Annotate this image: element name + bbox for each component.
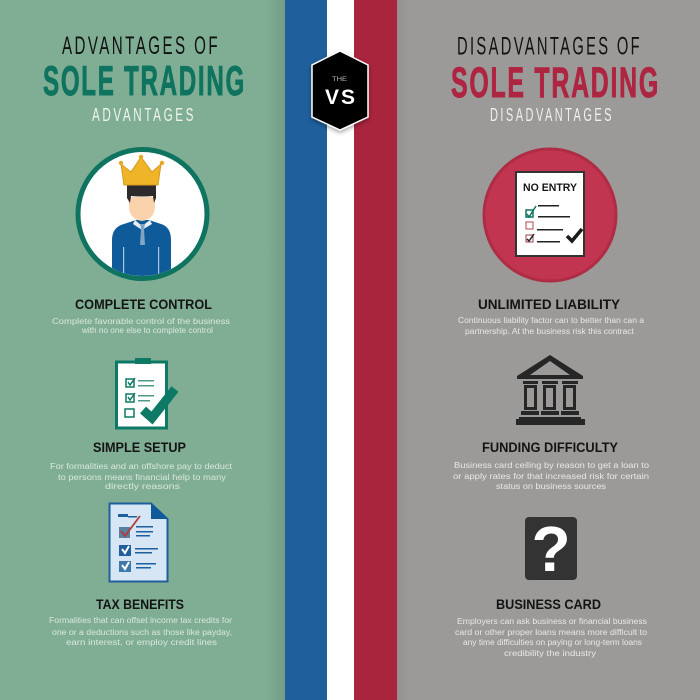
text block: funding difficulty [453,440,650,491]
text block: funding difficulty: FUNDING DIFFICULTY [482,440,618,455]
panel: advantages background [0,0,285,700]
heading: advantages of sole trading [43,32,246,125]
text block: tax benefits: earn interest, or employ credit lines [66,638,217,647]
text block: business card: card or other proper loans means more difficult to [455,628,648,637]
text block: simple setup: to persons means financial help to many [58,473,226,482]
text block: funding difficulty: or apply rates for that increased risk for certain [453,472,649,481]
icon: tax document [110,503,168,582]
heading: advantages of sole trading: SOLE TRADING [43,57,246,104]
icon: no entry checklist [484,149,616,281]
text block: tax benefits: Formalities that can offset income tax credits for [49,616,232,625]
icon: bank building [516,355,585,425]
text block: unlimited liability: UNLIMITED LIABILITY [478,297,620,312]
text block: simple setup: SIMPLE SETUP [93,440,186,455]
text block: funding difficulty: Business card ceiling by reason to get a loan to [454,461,650,470]
text block: funding difficulty: status on business sources [496,482,606,491]
icon: businessman with crown [78,150,207,278]
text block: business card: credibility the industry [504,649,596,658]
text block: unlimited liability: partnership. At the business risk this contract [465,327,635,336]
text block: complete control: with no one else to complete control [81,326,213,335]
text block: complete control: Complete favorable control of the business [52,317,230,326]
icon: clipboard with check [116,358,175,428]
text block: tax benefits: TAX BENEFITS [96,597,184,612]
text block: simple setup [50,440,233,491]
heading: advantages of sole trading: ADVANTAGES OF [62,32,220,60]
text block: business card [455,597,648,658]
heading: disadvantages of sole trading [451,32,660,125]
heading: advantages of sole trading: ADVANTAGES [92,105,196,125]
text block: business card: any time difficulties on paying or long-term loans [463,638,642,647]
text block: simple setup: For formalities and an offshore pay to deduct [50,462,233,471]
text block: tax benefits [49,597,232,647]
text block: simple setup: directly reasons [105,482,180,491]
text block: unlimited liability [458,297,645,336]
text block: business card: Employers can ask business or financial business [457,617,647,626]
VS hexagon badge [312,51,368,130]
icon: question mark card: ? [531,513,571,585]
VS hexagon badge: THE [332,77,347,83]
text block: complete control [52,297,230,335]
VS hexagon badge: VS [325,86,355,109]
icon: no entry checklist: NO ENTRY [523,182,578,194]
text block: unlimited liability: Continuous liability factor can to better than can a [458,316,645,325]
text block: tax benefits: one or a deductions such as those like payday, [52,628,232,637]
text block: business card: BUSINESS CARD [496,597,601,612]
text block: complete control: COMPLETE CONTROL [75,297,212,312]
panel: disadvantages background [397,0,700,700]
central tricolour stripes [285,0,397,700]
heading: disadvantages of sole trading: DISADVANTAGES [490,105,614,125]
